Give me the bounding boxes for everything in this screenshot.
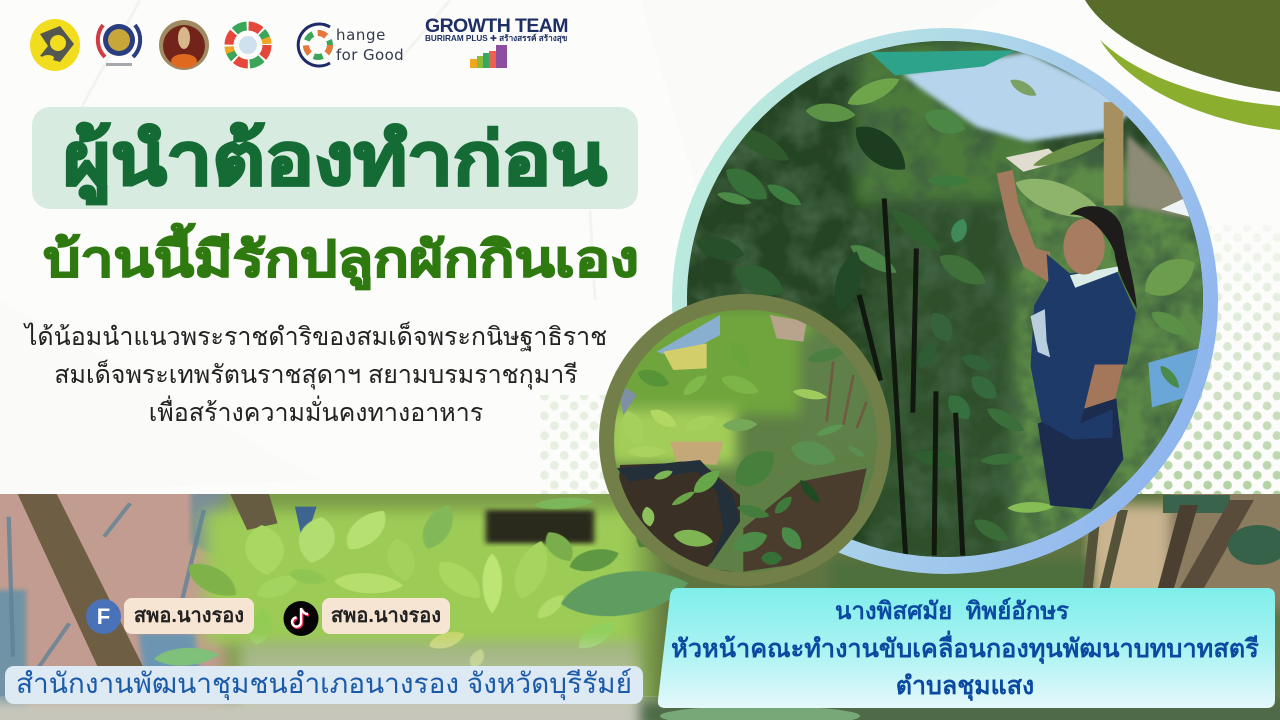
icon: Facebook <box>86 599 121 634</box>
label: Facebook page <box>124 598 254 634</box>
logo: Growth Team: GROWTH TEAM <box>425 15 568 37</box>
sky <box>902 52 1138 141</box>
subtitle: บ้านนี้มีรักปลูกผักกินเอง <box>43 233 639 287</box>
logo: yellow provincial seal <box>30 19 80 71</box>
logo: department seal <box>96 24 142 66</box>
description <box>23 322 607 427</box>
logo: district emblem <box>159 20 209 70</box>
person caption card <box>657 588 1275 708</box>
woman <box>997 170 1137 509</box>
title banner <box>32 107 638 209</box>
social: TikTok <box>284 598 450 636</box>
social: Facebook <box>86 598 254 634</box>
leaf shadow mottling <box>689 41 1203 557</box>
tarp and stones <box>657 315 720 358</box>
main circular photo: woman tending yard-long beans <box>687 41 1203 557</box>
ground, plastic and soil <box>670 442 723 465</box>
description: ได้น้อมนำแนวพระราชดำริของสมเด็จพระกนิษฐาธิราช <box>25 323 607 351</box>
person location: ตำบลชุมแสง <box>896 672 1034 700</box>
logo: Growth Team: BURIRAM PLUS ✚ สร้างสรรค์ สร้างสุข <box>425 34 567 43</box>
main circle ring <box>672 28 1218 574</box>
tree trunks <box>17 493 143 667</box>
corner swoosh: olive green <box>1085 0 1280 130</box>
label: TikTok account <box>322 598 450 634</box>
icon: Facebook: F <box>97 604 110 629</box>
blue streaks on rock <box>9 503 204 667</box>
label: Facebook page: สพอ.นางรอง <box>134 605 244 627</box>
decorative dot pattern <box>540 225 1280 494</box>
house and papaya <box>1127 134 1198 220</box>
icon: TikTok <box>284 601 318 636</box>
description: สมเด็จพระเทพรัตนราชสุดาฯ สยามบรมราชกุมารี <box>54 361 578 389</box>
photo band: vegetable garden <box>0 480 1280 720</box>
person name: นางพิสศมัย ทิพย์อักษร <box>835 598 1069 625</box>
small circular photo: vegetable plot <box>614 310 877 572</box>
logo: SDG wheel <box>224 22 272 68</box>
logo: Change for Good <box>296 22 404 68</box>
logo: Change for Good: hange <box>336 26 386 44</box>
person role: หัวหน้าคณะทำงานขับเคลื่อนกองทุนพัฒนาบทบาทสตรี <box>671 635 1259 663</box>
band right section <box>640 480 1280 720</box>
organization name bar: สำนักงานพัฒนาชุมชนอำเภอนางรอง จังหวัดบุรีรัมย์ <box>16 668 632 699</box>
band haze behind lower-left panels <box>240 642 640 720</box>
blue tarp <box>1148 348 1198 407</box>
logo: Growth Team <box>425 15 568 68</box>
description: เพื่อสร้างความมั่นคงทางอาหาร <box>149 399 483 427</box>
band left section in zoom coords <box>0 494 688 708</box>
bean poles <box>859 199 963 556</box>
logo: Change for Good: for Good <box>336 46 404 64</box>
logo row <box>30 15 568 71</box>
paper texture <box>0 0 1280 494</box>
shade net <box>870 50 1016 75</box>
lettuce leaves <box>153 496 694 669</box>
bean foliage <box>693 71 1203 547</box>
title text: ผู้นำต้องทำก่อน <box>63 120 607 200</box>
small circle ring <box>599 294 891 586</box>
wooden stakes <box>827 362 867 428</box>
label: TikTok account: สพอ.นางรอง <box>331 605 441 627</box>
seedlings and leaves <box>618 337 867 565</box>
